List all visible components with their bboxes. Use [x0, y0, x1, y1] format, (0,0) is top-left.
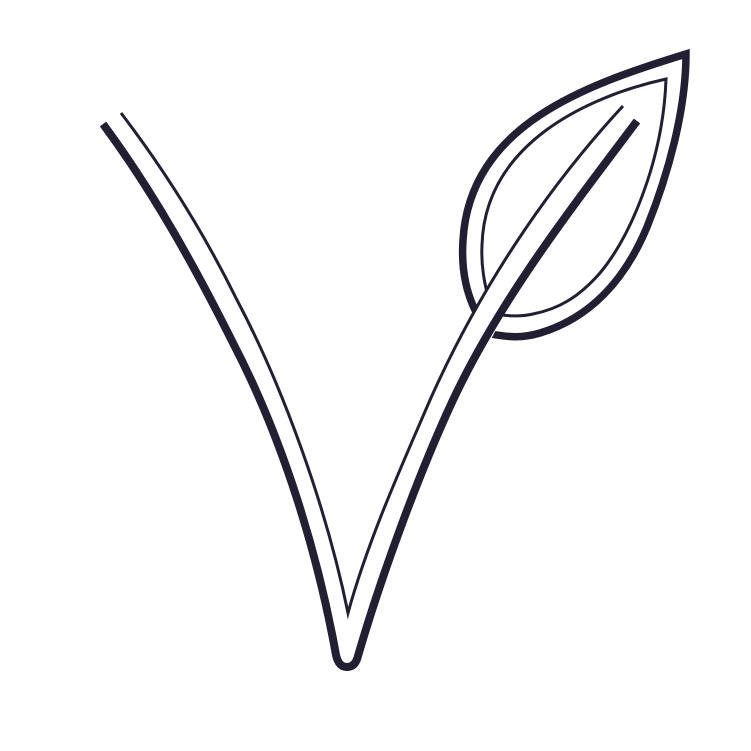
V inner thin stroke	[121, 106, 623, 613]
V outer thick stroke	[103, 121, 637, 667]
leaf outer thick stroke	[463, 54, 686, 337]
leaf inner thin stroke	[482, 79, 666, 316]
white band where the V stem crosses the leaf	[455, 273, 526, 350]
